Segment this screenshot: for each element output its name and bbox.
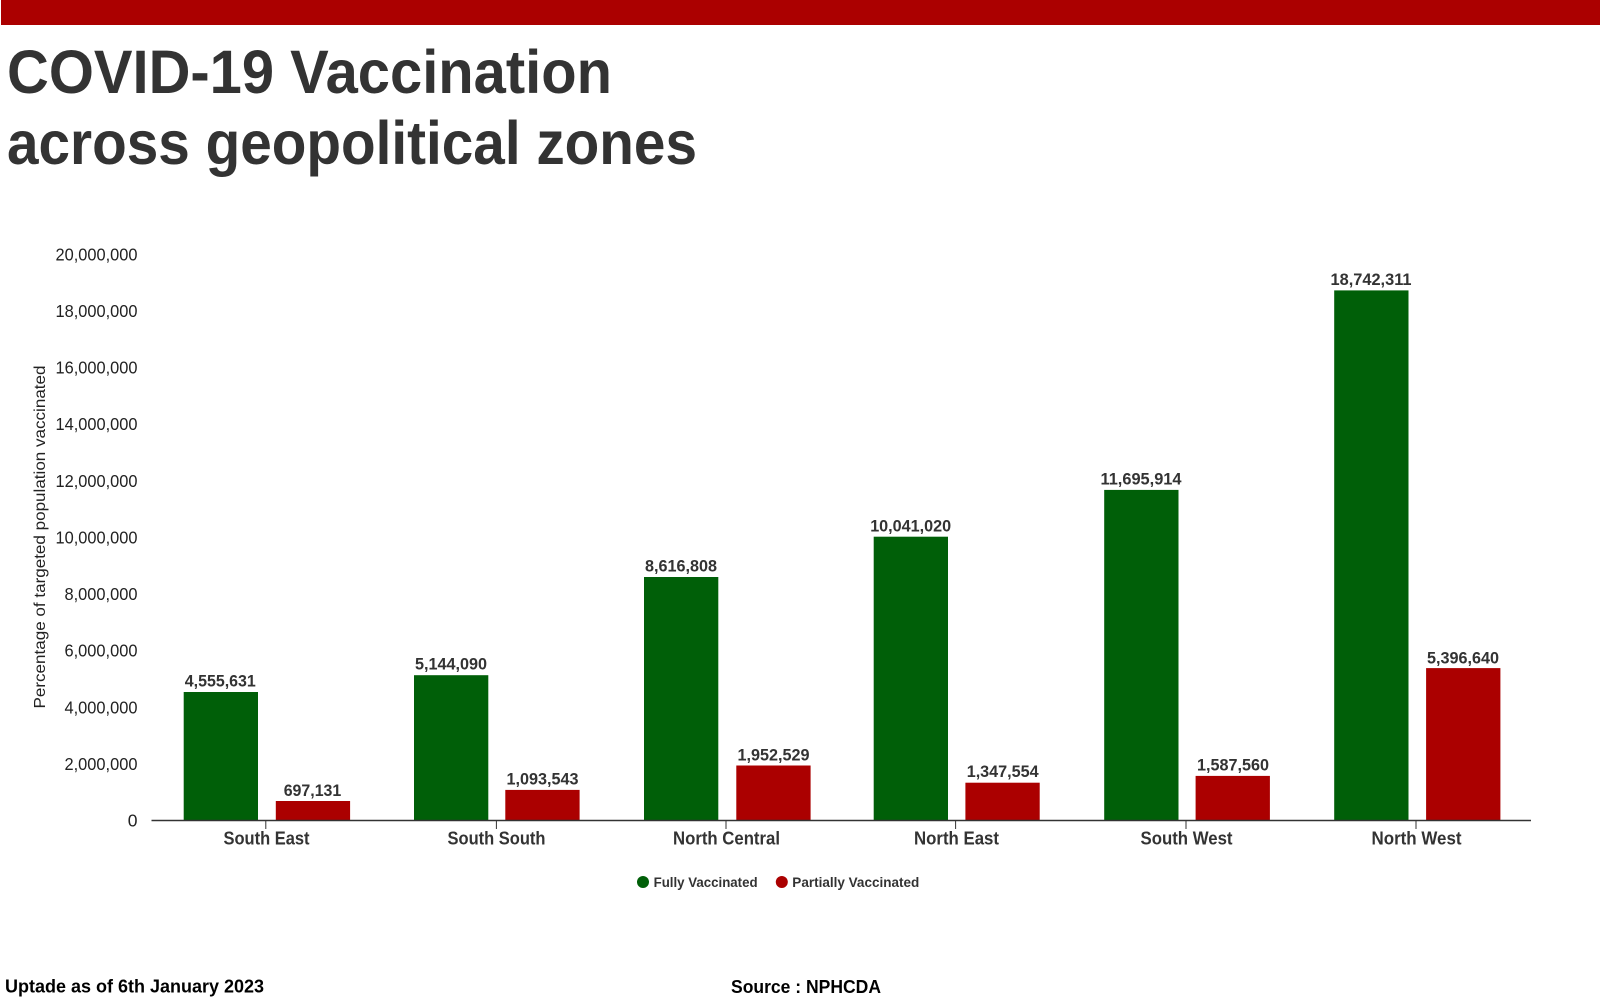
value labels: 4,555,631 <box>185 673 256 691</box>
y axis labels: 2,000,000 <box>64 754 138 774</box>
bars: fully vaccinated <box>184 290 1409 820</box>
y axis labels: 12,000,000 <box>56 471 138 491</box>
title <box>7 38 697 177</box>
value labels: 697,131 <box>284 782 341 800</box>
y axis labels: 8,000,000 <box>64 584 138 604</box>
category labels: North West <box>1372 827 1462 848</box>
value labels: 5,396,640 <box>1427 650 1499 668</box>
title: COVID-19 Vaccination <box>7 38 612 106</box>
bars: partially vaccinated <box>276 668 1500 820</box>
y axis title: Percentage of targeted population vaccinated <box>32 365 49 709</box>
y axis labels: 18,000,000 <box>56 301 138 321</box>
category labels: South West <box>1140 827 1232 848</box>
category labels: South South <box>448 827 546 848</box>
footer: source: Source : NPHCDA <box>731 976 881 997</box>
y axis labels: 4,000,000 <box>64 697 138 717</box>
value labels: 1,952,529 <box>738 747 810 765</box>
category labels: North Central <box>673 827 780 848</box>
category labels <box>224 827 1462 848</box>
y axis labels <box>56 244 138 830</box>
value labels: 1,587,560 <box>1197 757 1269 775</box>
value labels: 1,347,554 <box>967 763 1040 781</box>
value labels: 18,742,311 <box>1330 271 1412 289</box>
y axis labels: 16,000,000 <box>56 358 138 378</box>
y axis labels: 0 <box>128 810 138 830</box>
y axis labels: 6,000,000 <box>64 641 138 661</box>
top banner <box>1 0 1600 25</box>
x axis <box>152 820 1531 829</box>
legend: Fully Vaccinated <box>654 874 758 890</box>
y axis labels: 20,000,000 <box>56 244 138 264</box>
legend: Partially Vaccinated <box>792 874 919 890</box>
category labels: North East <box>914 827 999 848</box>
y axis labels: 10,000,000 <box>56 527 138 547</box>
title: across geopolitical zones <box>7 109 697 177</box>
value labels: 1,093,543 <box>506 771 578 789</box>
value labels: 5,144,090 <box>415 656 487 674</box>
footer: update date: Uptade as of 6th January 2023 <box>5 976 264 996</box>
y axis labels: 14,000,000 <box>56 414 138 434</box>
category labels: South East <box>224 827 310 848</box>
value labels: 11,695,914 <box>1100 471 1182 489</box>
value labels: 8,616,808 <box>645 558 717 576</box>
value labels: 10,041,020 <box>870 518 951 536</box>
legend <box>637 874 919 890</box>
value labels <box>185 271 1499 800</box>
